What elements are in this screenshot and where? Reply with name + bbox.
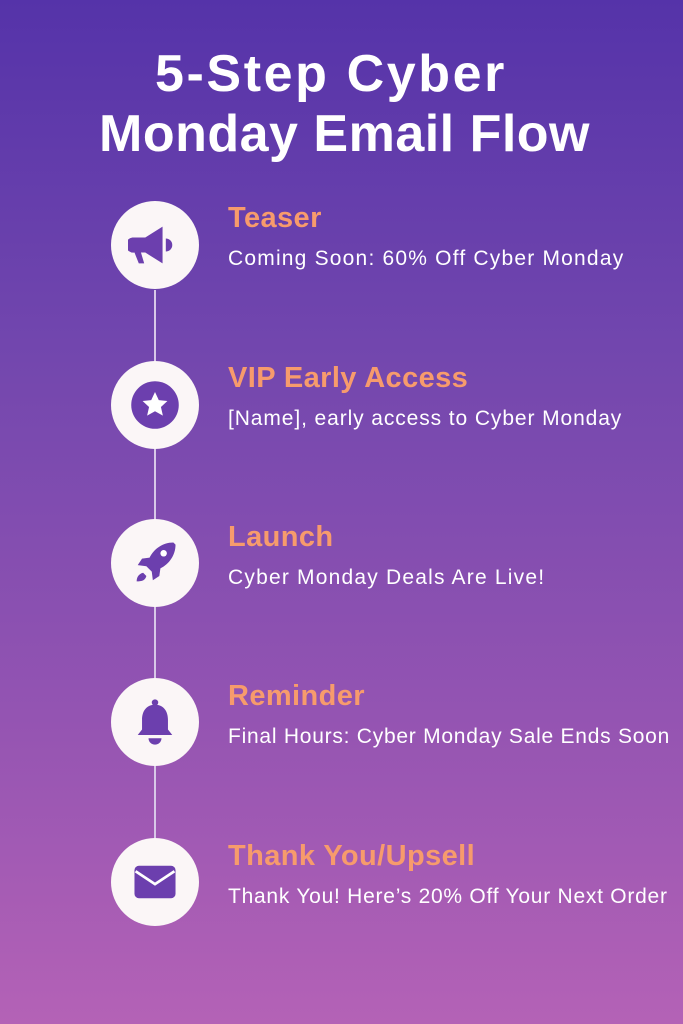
step 3 text [228,521,545,589]
step 4 text: Reminder [228,680,365,712]
step 4 icon: bell [111,678,199,766]
step 4 text [228,680,670,748]
step 1 text: Teaser [228,202,322,234]
step 3 text: Launch [228,521,334,553]
step 3 icon: rocket [111,519,199,607]
step 1 text: Coming Soon: 60% Off Cyber Monday [228,247,624,270]
connector line [154,290,156,840]
title [99,45,590,163]
step 5 text: Thank You/Upsell [228,840,475,872]
step 5 text [228,840,668,908]
step 4 text: Final Hours: Cyber Monday Sale Ends Soon [228,725,670,748]
step 2 icon: star [111,361,199,449]
step 5 icon: envelope [111,838,199,926]
title: 5-Step Cyber [155,45,507,103]
step 1 icon: megaphone [111,201,199,289]
title: Monday Email Flow [99,105,590,163]
step 1 text [228,202,624,270]
step 2 text: [Name], early access to Cyber Monday [228,407,622,430]
step 5 text: Thank You! Here’s 20% Off Your Next Order [228,885,668,908]
step 3 text: Cyber Monday Deals Are Live! [228,566,545,589]
step 2 text: VIP Early Access [228,362,468,394]
step 2 text [228,362,622,430]
